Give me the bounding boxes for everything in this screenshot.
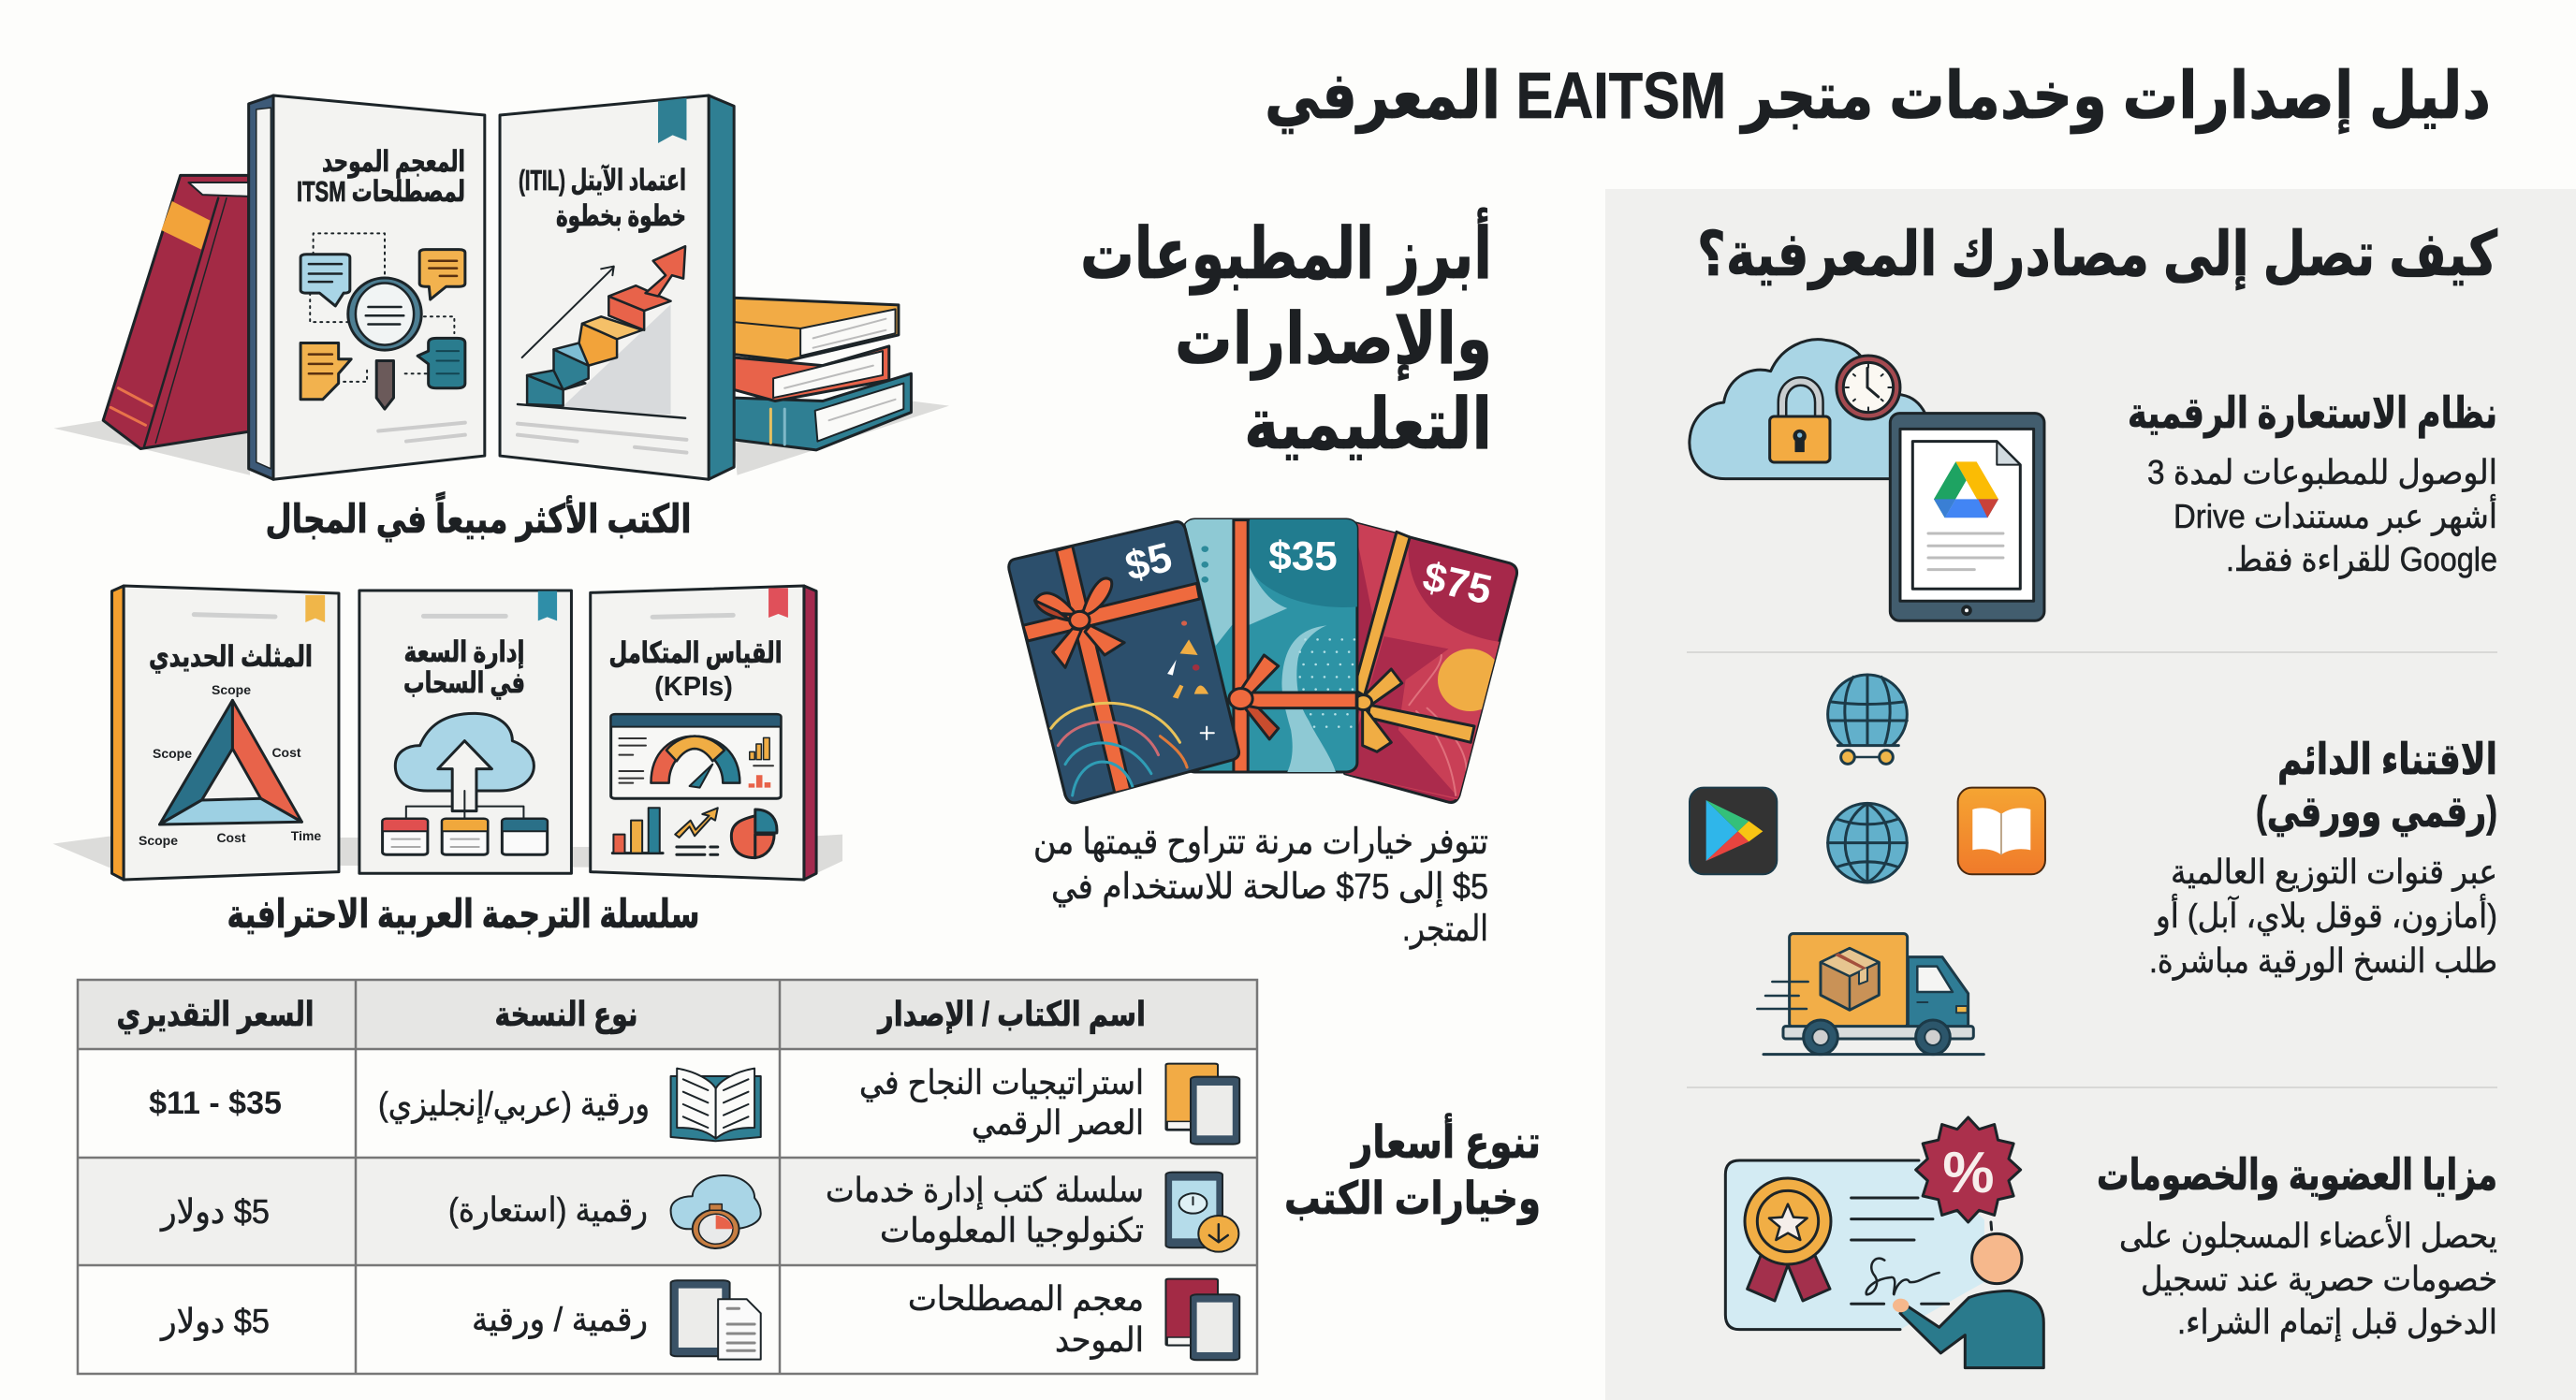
cover title: dictionary: المعجم الموحد (322, 145, 465, 179)
heading: book prices and options: وخيارات الكتب (1284, 1174, 1541, 1225)
gift card description: المتجر. (1402, 910, 1488, 950)
cover titles and labels: Cost (271, 745, 301, 760)
cover title: ITIL: اعتماد الآيتل (ITIL) (519, 163, 686, 197)
card price labels: $35 (1268, 533, 1338, 579)
table row 3: $5 دولار (159, 1302, 270, 1341)
table row 2: $5 دولار (159, 1192, 270, 1232)
icon: Apple Books (1958, 788, 2045, 874)
table row 1: $11 - $35 (149, 1086, 282, 1121)
section: membership and discounts text: يحصل الأعضاء المسجلون على (2119, 1215, 2497, 1256)
cover titles and labels: Scope (212, 682, 251, 697)
icon: globe (1828, 803, 1907, 882)
cover title: ITIL: خطوة بخطوة (556, 199, 686, 233)
section: permanent ownership text: (رقمي وورقي) (2256, 787, 2497, 837)
table header: اسم الكتاب / الإصدار (876, 995, 1146, 1034)
icon: cloud, lock, clock and tablet with Drive (1690, 340, 2044, 620)
table row 3 (159, 1279, 1144, 1360)
table header (116, 995, 1146, 1034)
table row 3: الموحد (1055, 1320, 1144, 1360)
section: membership and discounts text: الدخول قبل إتمام الشراء. (2177, 1303, 2497, 1342)
cover titles and labels: (KPIs) (654, 672, 733, 702)
card: 5 dollars (1009, 521, 1239, 803)
cover titles and labels (139, 635, 783, 848)
table icons (671, 1064, 1239, 1360)
icon: orange book and tablet (1165, 1064, 1239, 1145)
section: permanent ownership text: (أمازون، قوقل بلاي، آبل) أو (2154, 894, 2497, 936)
table row 1: ورقية (عربي/إنجليزي) (378, 1085, 650, 1124)
icon: tablet and document (671, 1280, 761, 1360)
table row 1: استراتيجيات النجاح في (859, 1063, 1144, 1102)
table row 1 (149, 1063, 1144, 1143)
table: book prices (78, 980, 1257, 1374)
section: permanent ownership text: طلب النسخ الورقية مباشرة. (2149, 941, 2497, 981)
card price labels: $5 (1120, 534, 1177, 590)
table row 2: تكنولوجيا المعلومات (880, 1211, 1144, 1250)
table row 3: رقمية / ورقية (472, 1300, 648, 1339)
icon: tablet with clock and download (1165, 1173, 1238, 1252)
book: KPIs (591, 586, 816, 880)
panel: how to access your knowledge sources (1605, 189, 2576, 1400)
books: stacked (734, 298, 911, 450)
book: cloud capacity (359, 591, 571, 873)
caption: best-selling books: الكتب الأكثر مبيعاً في المجال (266, 491, 691, 543)
gift cards (1009, 519, 1517, 803)
icon: Google Play (1690, 788, 1777, 874)
heading: book prices and options (1284, 1113, 1541, 1225)
cover title: dictionary: لمصطلحات ITSM (297, 175, 465, 208)
icon: delivery truck (1757, 934, 1983, 1055)
book cover: ITIL step by step (500, 95, 734, 479)
heading: prints and publications: أبرز المطبوعات (1080, 207, 1492, 296)
heading: prints and publications: والإصدارات (1175, 299, 1492, 381)
card: 75 dollars (1345, 522, 1517, 802)
table row 2: رقمية (استعارة) (448, 1190, 648, 1230)
cover titles and labels: Cost (216, 830, 246, 845)
illustration: best-selling books (53, 95, 949, 479)
icon: membership card, discount badge and person (1725, 1117, 2043, 1368)
table header: نوع النسخة (494, 995, 638, 1034)
cover titles and labels: في السحاب (403, 666, 525, 700)
icon: crimson book and tablet (1165, 1279, 1239, 1360)
table row 2: سلسلة كتب إدارة خدمات (826, 1171, 1144, 1210)
card price labels: $75 (1419, 553, 1496, 614)
cover titles and labels: القياس المتكامل (608, 636, 783, 670)
section: permanent ownership text: الاقتناء الدائم (2277, 735, 2497, 784)
table header: السعر التقديري (116, 995, 315, 1034)
cover titles and labels: Time (291, 828, 321, 843)
heading: prints and publications: التعليمية (1244, 385, 1492, 464)
icon: globe with nodes (1828, 675, 1907, 764)
section: digital lending text: أشهر عبر مستندات Drive (2174, 494, 2497, 536)
section: digital lending text (2128, 388, 2497, 579)
book: iron triangle (112, 586, 339, 880)
card: 35 dollars (1184, 519, 1357, 772)
section: digital lending text: Google للقراءة فقط. (2226, 540, 2497, 579)
table row 3: معجم المصطلحات (908, 1279, 1144, 1319)
section: membership and discounts text (2097, 1150, 2497, 1342)
cover title: ITIL (519, 163, 686, 233)
book cover: unified dictionary (249, 95, 485, 479)
percent sign: % (1942, 1141, 1995, 1205)
book: red leaning (103, 175, 249, 448)
section: permanent ownership text (2149, 735, 2497, 981)
icon: cloud with stopwatch (671, 1175, 761, 1248)
icon: globes, store apps and delivery truck (1690, 675, 2045, 1055)
gift card description: تتوفر خيارات مرنة تتراوح قيمتها من (1033, 823, 1488, 863)
cover titles and labels: Scope (153, 746, 192, 761)
table row 1: العصر الرقمي (972, 1103, 1144, 1143)
cover titles and labels: Scope (139, 833, 178, 848)
table row 2 (159, 1171, 1144, 1250)
heading: prints and publications (1080, 207, 1492, 464)
card price labels (1120, 533, 1496, 614)
gift card description (1033, 823, 1488, 950)
section: membership and discounts text: خصومات حصرية عند تسجيل (2141, 1260, 2497, 1299)
illustration: Arabic translation series (52, 586, 842, 880)
section: permanent ownership text: عبر قنوات التوزيع العالمية (2171, 853, 2497, 892)
icon: open book (671, 1069, 761, 1141)
cover titles and labels: المثلث الحديدي (149, 640, 313, 674)
cover titles and labels: إدارة السعة (404, 635, 524, 669)
cover title: dictionary (297, 145, 465, 208)
gift card description: $5 إلى ‎$75 صالحة للاستخدام في (1051, 868, 1488, 908)
caption: translation series: سلسلة الترجمة العربية الاحترافية (227, 892, 700, 938)
heading: book prices and options: تنوع أسعار (1350, 1113, 1541, 1169)
section: digital lending text: الوصول للمطبوعات لمدة 3 (2147, 453, 2497, 492)
